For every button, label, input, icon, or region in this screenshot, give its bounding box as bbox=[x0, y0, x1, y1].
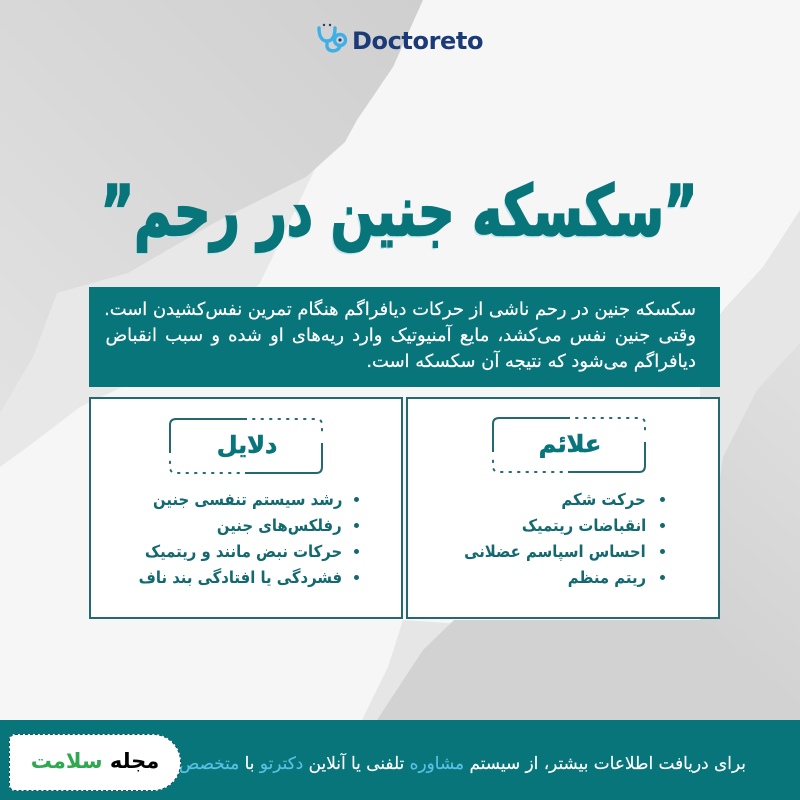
heading: symptoms bbox=[492, 417, 646, 473]
list: causes: فشردگی یا افتادگی بند ناف bbox=[138, 568, 342, 587]
intro text: سکسکه جنین در رحم ناشی از حرکات دیافراگم هنگام تمرین نفس‌کشیدن است. bbox=[104, 299, 696, 320]
heading: causes bbox=[169, 418, 323, 474]
intro text: وقتی جنین نفس می‌کشد، مایع آمنیوتیک وارد ریه‌های او شده و سبب انقباض bbox=[106, 325, 696, 346]
heading: causes: دلایل bbox=[217, 431, 277, 459]
list: symptoms: احساس اسپاسم عضلانی bbox=[464, 542, 646, 561]
list: causes: رفلکس‌های جنین bbox=[217, 516, 342, 535]
list: symptoms bbox=[464, 490, 665, 587]
title: ”سکسکه جنین در رحم” bbox=[101, 170, 697, 252]
badge: health magazine: مجله سلامت bbox=[31, 749, 159, 773]
list: symptoms: حرکت شکم bbox=[562, 490, 646, 509]
panel: causes bbox=[89, 397, 403, 619]
logo wordmark: Doctoreto bbox=[352, 27, 483, 55]
intro text: دیافراگم می‌شود که نتیجه آن سکسکه است. bbox=[366, 351, 696, 372]
badge: health magazine bbox=[9, 734, 181, 791]
heading: symptoms: علائم bbox=[539, 430, 601, 458]
list: causes bbox=[138, 490, 359, 588]
icon: stethoscope bbox=[317, 24, 348, 53]
list: causes: رشد سیستم تنفسی جنین bbox=[153, 490, 342, 509]
list: causes: حرکات نبض مانند و ریتمیک bbox=[145, 542, 342, 561]
list: symptoms: انقباضات ریتمیک bbox=[522, 516, 646, 535]
footer bar bbox=[0, 720, 800, 800]
logo: Doctoreto bbox=[317, 24, 483, 55]
footer text: برای دریافت اطلاعات بیشتر، از سیستم مشاوره تلفنی یا آنلاین دکترتو با متخصص bbox=[179, 753, 746, 773]
list: symptoms: ریتم منظم bbox=[568, 568, 646, 587]
intro text bbox=[104, 298, 696, 372]
intro panel bbox=[89, 287, 720, 387]
panel: symptoms bbox=[406, 397, 720, 619]
